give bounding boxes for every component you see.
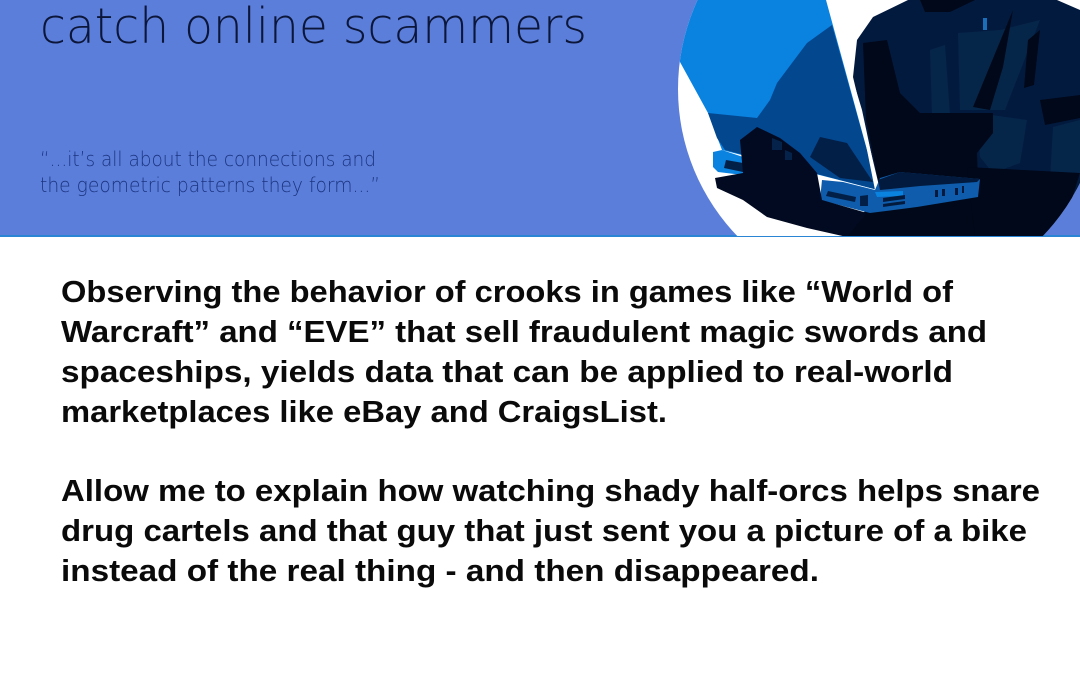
- white circle: [678, 0, 1080, 236]
- hoodie shadows: [847, 0, 1080, 237]
- hand: [715, 127, 867, 237]
- paragraph 1: marketplaces like eBay and CraigsList.: [61, 394, 667, 429]
- paragraph 1: Warcraft” and “EVE” that sell fraudulent magic swords and: [61, 314, 987, 349]
- header band: [0, 0, 1080, 237]
- hoodie lighter folds: [930, 20, 1080, 180]
- zipper pull: [983, 18, 987, 30]
- knuckle highlights: [772, 138, 792, 160]
- quote: the geometric patterns they form...”: [40, 173, 380, 197]
- laptop base: [713, 150, 980, 213]
- laptop screen: [670, 0, 878, 190]
- paragraph 1: spaceships, yields data that can be applied to real-world: [61, 354, 953, 389]
- paragraph 1: Observing the behavior of crooks in games like “World of: [61, 274, 954, 309]
- illustration: hooded figure with laptop: [678, 0, 1080, 236]
- laptop edge highlight: [856, 88, 877, 190]
- paragraph 1: [61, 274, 987, 429]
- paragraph 2: [61, 473, 1040, 588]
- paragraph 2: instead of the real thing - and then disappeared.: [61, 553, 819, 588]
- quote: [40, 147, 380, 197]
- quote: “...it’s all about the connections and: [40, 147, 376, 171]
- hoodie: [847, 0, 1080, 236]
- paragraph 2: Allow me to explain how watching shady half-orcs helps snare: [61, 473, 1040, 508]
- paragraph 2: drug cartels and that guy that just sent you a picture of a bike: [61, 513, 1027, 548]
